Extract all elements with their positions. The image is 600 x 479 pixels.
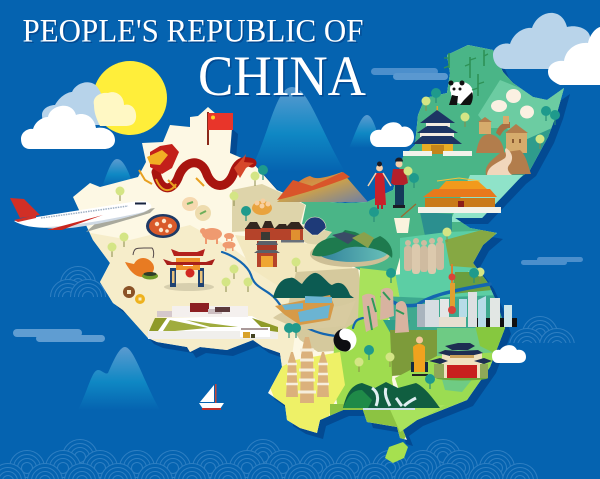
title: [22, 14, 368, 110]
chinese temple gate: [429, 343, 492, 380]
flag: [207, 112, 233, 145]
cloud lower right: [492, 345, 526, 363]
terraced lakes and dark mountains: [273, 273, 356, 330]
steamed buns: [491, 89, 534, 118]
coins: [123, 286, 145, 304]
yin yang: [334, 328, 356, 352]
pigs: [200, 228, 236, 251]
title: CHINA: [200, 46, 368, 110]
title: PEOPLE'S REPUBLIC OF: [22, 14, 364, 50]
title: PEOPLE'S REPUBLIC OF: [24, 15, 365, 51]
fan: [304, 217, 326, 235]
waterfall and mountains: [343, 382, 440, 410]
river system: [222, 252, 490, 336]
noodle box: [394, 204, 416, 233]
panda: [448, 80, 473, 105]
mountains in the background: [78, 87, 382, 410]
monk: [411, 336, 428, 376]
temple of heaven: [403, 106, 472, 156]
sailboat: [199, 384, 224, 410]
wave pattern: right sea: [509, 316, 575, 343]
steamed buns basket: [252, 198, 272, 215]
map of China with provinces: [60, 40, 580, 450]
bamboo: [444, 50, 488, 96]
paifang gate: [163, 249, 215, 291]
dumplings: [182, 197, 211, 221]
title: CHINA: [198, 45, 366, 108]
people in traditional clothes: [368, 158, 408, 209]
cloud centre: [370, 122, 414, 147]
teapot: [125, 248, 158, 280]
mountain orange peak: [277, 172, 368, 202]
cloud strips: [13, 68, 583, 342]
lake and mountains: [310, 230, 392, 267]
terracotta warriors: [404, 237, 444, 274]
ancient town buildings: [245, 221, 304, 267]
clouds top right: [493, 13, 600, 85]
land shadow: [79, 51, 570, 446]
pagodas: [286, 337, 329, 403]
trees: [108, 88, 560, 389]
wave pattern: bottom sea: [0, 440, 538, 479]
sun: [93, 61, 167, 135]
tofu dish: [146, 214, 180, 238]
karst pillars: [362, 288, 409, 333]
forbidden city: [418, 178, 501, 213]
island of Hainan: [385, 442, 408, 463]
dragon: [139, 144, 254, 190]
airplane: [10, 198, 155, 232]
wave pattern: left sea: [50, 266, 106, 297]
shanghai skyline: [417, 264, 517, 327]
great wall: [476, 116, 531, 175]
potala palace: [148, 303, 278, 339]
clouds near the sun: [21, 82, 136, 149]
